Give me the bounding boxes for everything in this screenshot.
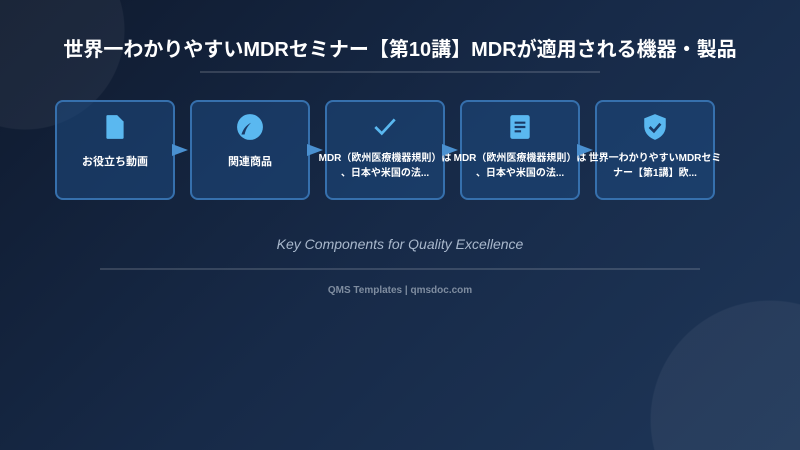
title: 世界一わかりやすいMDRセミナー【第10講】MDRが適用される機器・製品 xyxy=(63,39,737,61)
text: step 3 xyxy=(319,152,451,179)
arrow 4 xyxy=(577,144,593,156)
subtitle: Key Components for Quality Excellence xyxy=(277,236,523,252)
footer: QMS Templates | qmsdoc.com xyxy=(328,285,472,296)
text: step 4: MDR（欧州医療機器規則）は xyxy=(454,153,586,164)
icon: file xyxy=(106,115,124,139)
text: step 1: お役立ち動画 xyxy=(82,156,148,168)
panel: step 1 xyxy=(55,100,175,200)
icon: check xyxy=(374,118,396,136)
text: step 3: 、日本や米国の法... xyxy=(341,168,429,179)
text: step 2: 関連商品 xyxy=(228,156,272,168)
panel: step 3 xyxy=(325,100,445,200)
arrow 3 xyxy=(442,144,458,156)
icon: leaf xyxy=(237,114,263,140)
arrow 2 xyxy=(307,144,323,156)
text: step 5: 世界一わかりやすいMDRセミ xyxy=(589,153,721,164)
panel: step 4 xyxy=(460,100,580,200)
text: step 5: ナー【第1講】欧... xyxy=(613,168,697,179)
text: step 3: MDR（欧州医療機器規則）は xyxy=(319,153,451,164)
panel: step 2 xyxy=(190,100,310,200)
text: step 4: 、日本や米国の法... xyxy=(476,168,564,179)
panel: step 5 xyxy=(595,100,715,200)
text: step 4 xyxy=(454,152,586,179)
icon: shield xyxy=(644,114,666,140)
arrow 1 xyxy=(172,144,188,156)
icon: document xyxy=(510,115,530,139)
text: step 5 xyxy=(589,152,721,179)
